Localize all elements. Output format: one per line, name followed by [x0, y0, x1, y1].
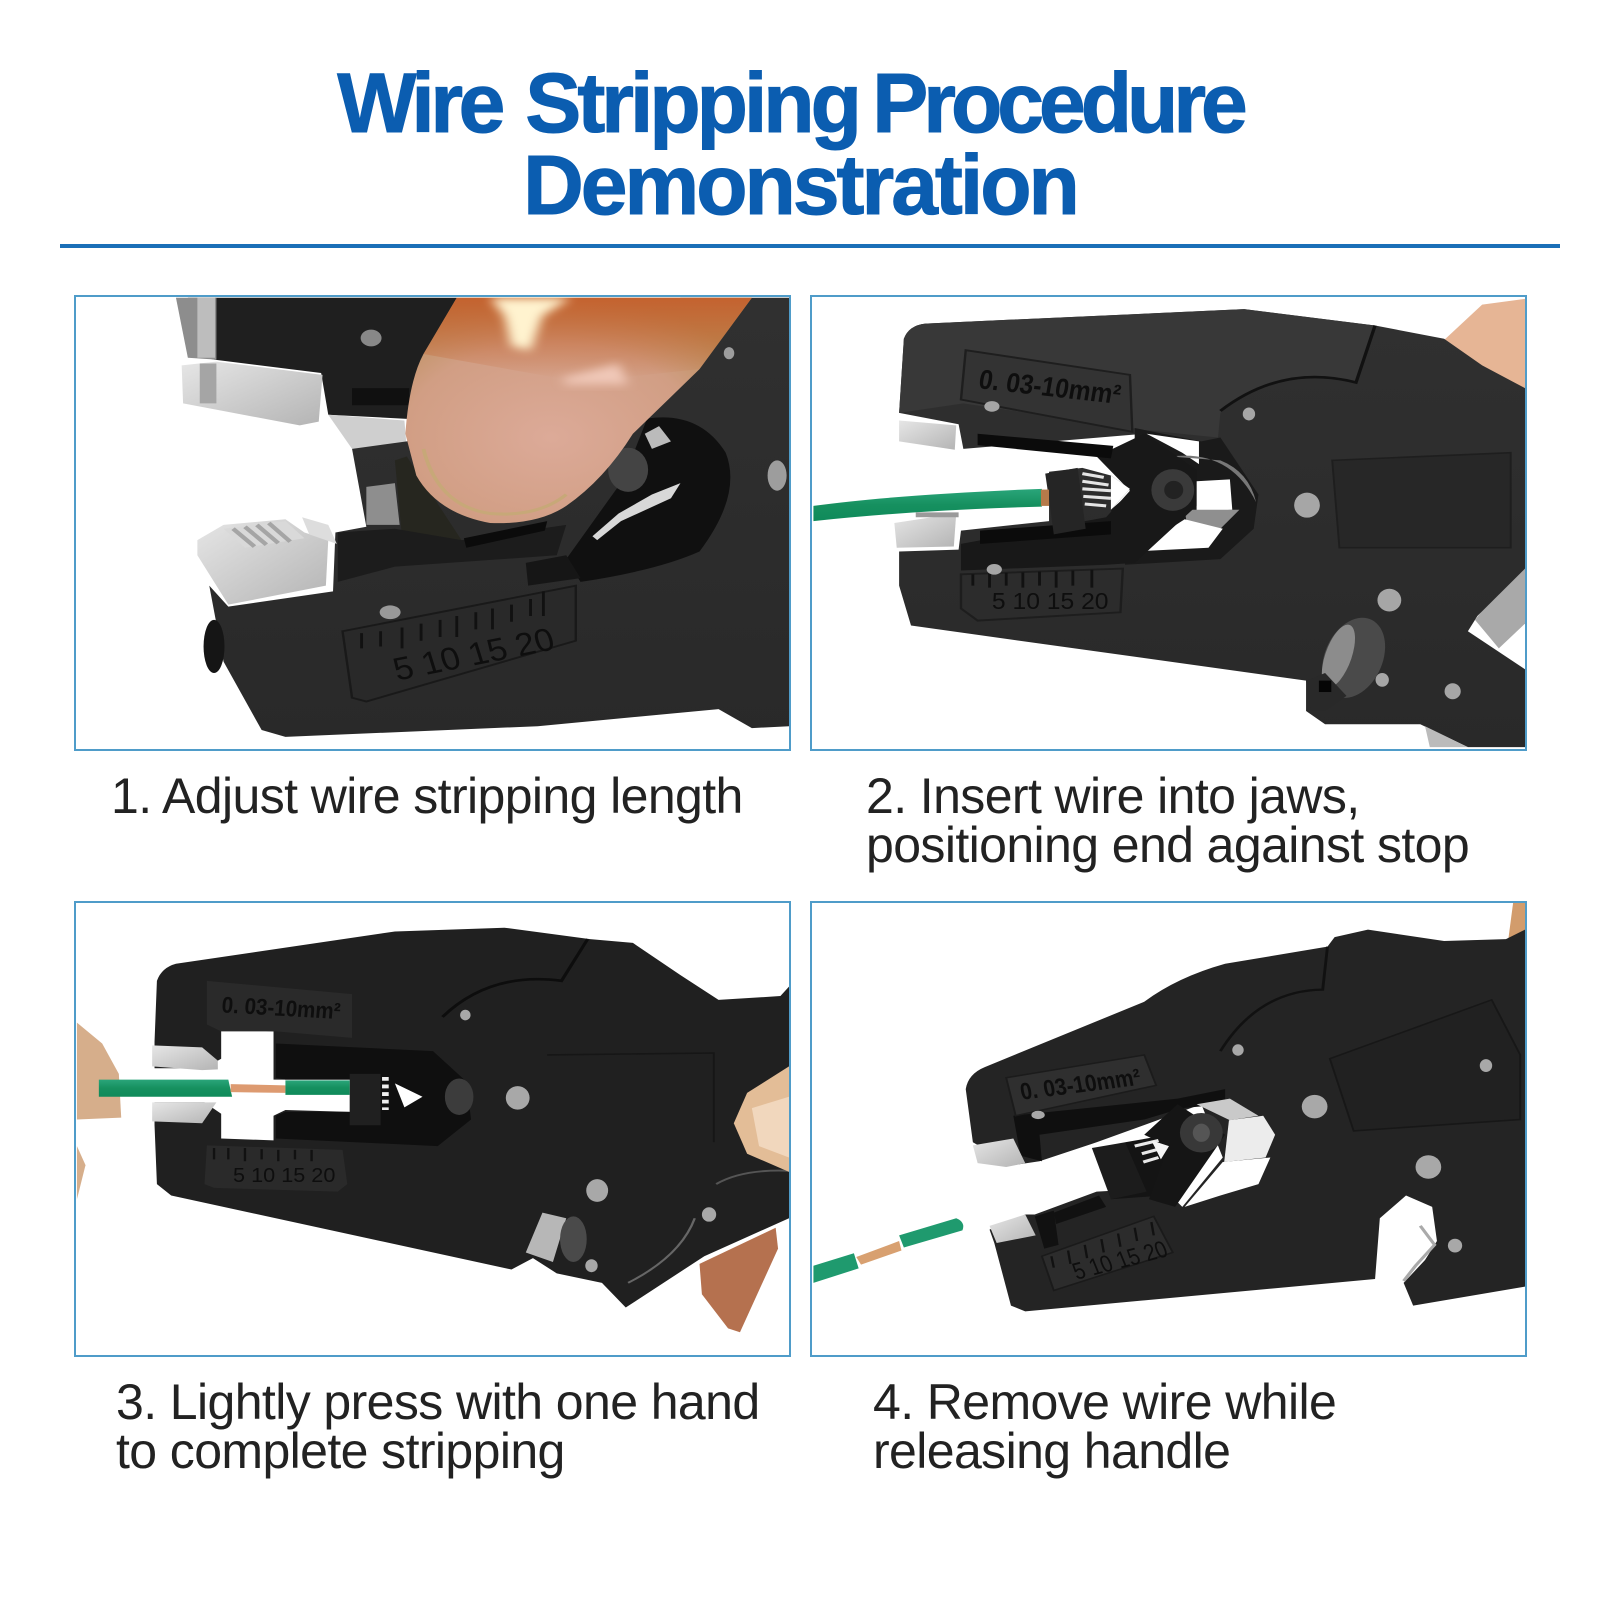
inner blades	[276, 1043, 471, 1146]
mouth opening	[133, 1029, 350, 1140]
grey handle tip	[1475, 569, 1524, 648]
upper jaw	[176, 298, 457, 449]
lower jaw silver block	[197, 517, 337, 605]
silver jaw blocks	[972, 1138, 1035, 1242]
length scale	[343, 586, 576, 702]
caption: step 1: 1. Adjust wire stripping length	[111, 768, 743, 824]
title: Procedure	[872, 56, 1243, 150]
finger	[1508, 902, 1524, 939]
rivets	[460, 1009, 716, 1272]
label plate	[1006, 1054, 1156, 1115]
label plate: 0. 03-10mm²	[1017, 1063, 1142, 1104]
length scale: 5 10 15 20	[388, 621, 559, 687]
right finger	[734, 1066, 789, 1171]
silver jaw blocks	[894, 420, 956, 548]
panel: step 1 photo	[74, 295, 791, 751]
length scale: 5 10 15 20	[1068, 1235, 1171, 1284]
label plate	[960, 350, 1132, 432]
title: Wire	[337, 56, 501, 150]
hand	[1439, 299, 1524, 396]
panel: step 3 photo	[74, 900, 791, 1356]
green wire	[813, 489, 1049, 521]
lower hand	[700, 1227, 778, 1332]
rivets	[724, 347, 787, 491]
caption: step 4	[873, 1374, 1336, 1479]
pin	[204, 620, 225, 673]
upper jaw highlight	[899, 309, 1375, 438]
caption: step 4: releasing handle	[873, 1423, 1230, 1479]
caption: step 4: 4. Remove wire while	[873, 1374, 1336, 1430]
caption: step 3	[116, 1374, 760, 1479]
caption: step 2	[866, 768, 1469, 873]
silver jaw blocks	[152, 1045, 218, 1123]
tool body	[155, 927, 789, 1307]
label plate: 0. 03-10mm²	[221, 993, 342, 1024]
spring	[1134, 1140, 1168, 1162]
handle seam	[716, 1170, 789, 1184]
mouth lobe	[1184, 1157, 1270, 1206]
length scale: 5 10 15 20	[233, 1163, 335, 1186]
bottom grey stub	[1425, 726, 1467, 747]
length scale	[205, 1145, 347, 1191]
spring and chevron	[385, 1076, 473, 1114]
raised plate	[1329, 999, 1520, 1130]
length scale	[1041, 1216, 1172, 1290]
left fingers	[77, 1022, 121, 1199]
length scale	[960, 569, 1122, 621]
tool body	[899, 309, 1524, 747]
header divider	[60, 244, 1560, 248]
tool body	[965, 929, 1524, 1311]
thumb	[405, 298, 752, 523]
panel: step 2 photo	[810, 295, 1526, 751]
rivets	[1031, 1044, 1492, 1252]
jaw opening	[338, 417, 730, 586]
handle highlight	[1403, 1225, 1434, 1280]
thumb screw	[526, 1212, 587, 1261]
label plate	[207, 980, 352, 1037]
title	[336, 56, 1246, 232]
blades	[977, 434, 1113, 544]
jaw opening	[960, 428, 1258, 570]
raised plate	[547, 1053, 714, 1142]
stripped wire	[99, 1079, 350, 1096]
seam	[442, 939, 588, 1016]
label plate: 0. 03-10mm²	[976, 364, 1123, 410]
title: Stripping	[525, 56, 858, 150]
seam	[1220, 946, 1327, 1051]
caption: step 2: 2. Insert wire into jaws,	[866, 768, 1360, 824]
caption: step 2: positioning end against stop	[866, 817, 1469, 873]
rivets	[984, 401, 1460, 699]
tool body	[209, 298, 789, 737]
panel: step 4 photo	[810, 900, 1526, 1356]
thumb screw	[1306, 612, 1395, 711]
raised plate	[1332, 453, 1510, 548]
cam block	[1196, 1098, 1275, 1162]
title: Demonstration	[523, 138, 1077, 232]
stripped wire	[813, 1218, 963, 1282]
seam	[1220, 325, 1375, 411]
length scale: 5 10 15 20	[991, 588, 1108, 615]
caption: step 3: 3. Lightly press with one hand	[116, 1374, 760, 1430]
caption: step 3: to complete stripping	[116, 1423, 565, 1479]
inner pieces	[1013, 1089, 1225, 1248]
wire stop with spring	[1045, 468, 1129, 534]
